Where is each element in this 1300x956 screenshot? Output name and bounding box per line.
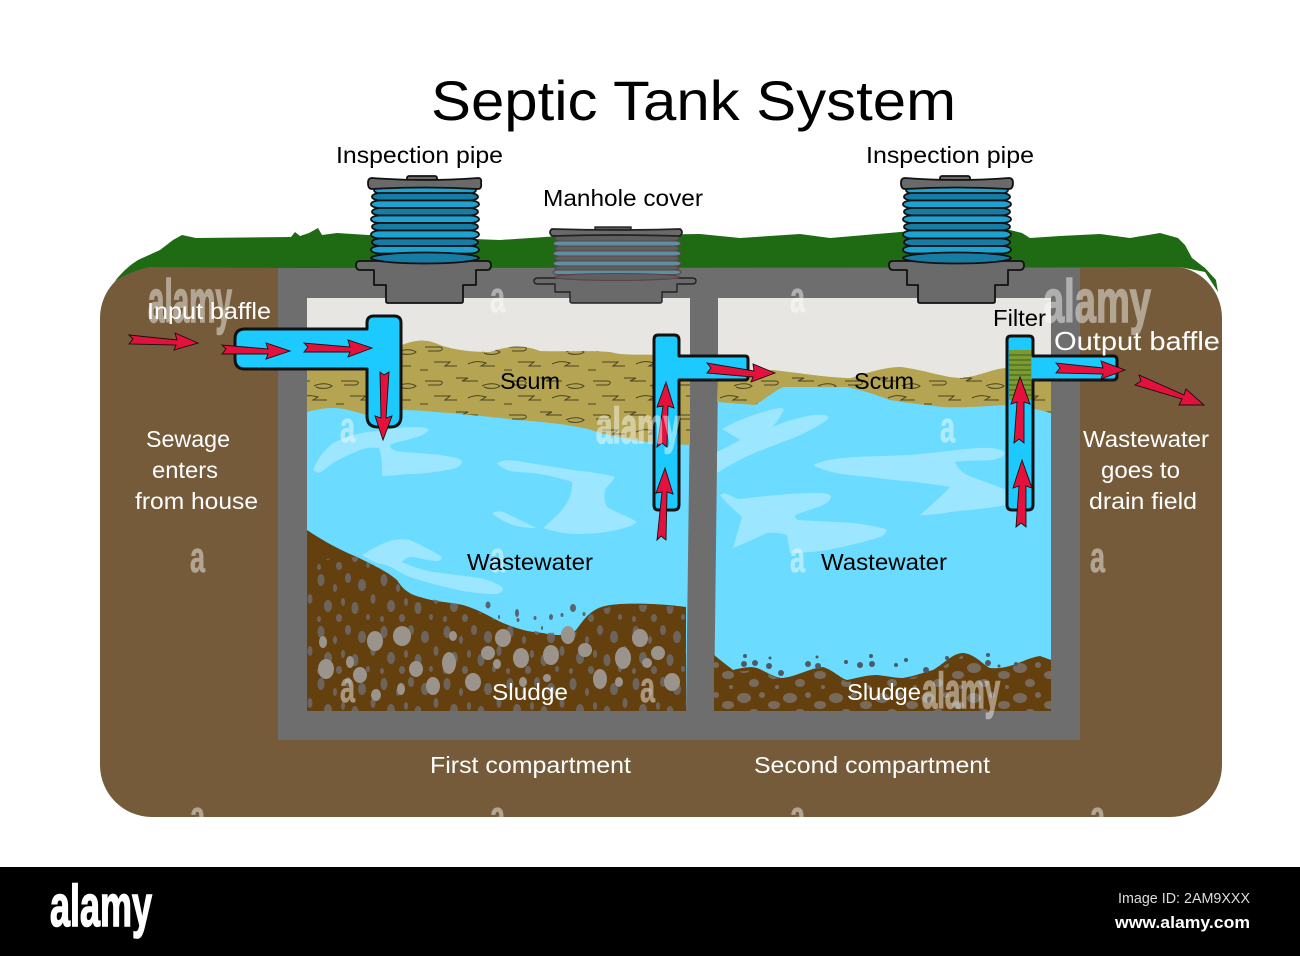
text: sewage enters from house <box>135 426 258 514</box>
input baffle pipe <box>235 316 401 427</box>
flow arrows <box>129 333 1204 540</box>
text: wastewater goes to drain field <box>1083 426 1209 514</box>
watermark: a <box>640 663 655 712</box>
watermark: a <box>940 403 955 452</box>
watermark: alamy <box>148 268 232 335</box>
scum texture <box>717 367 1051 413</box>
wastewater <box>714 380 1051 711</box>
title: Septic Tank System <box>431 69 956 132</box>
watermark: a <box>340 403 355 452</box>
label: inspection pipe left: Inspection pipe <box>336 142 503 168</box>
image id: Image ID: 2AM9XXX <box>1118 890 1250 907</box>
watermark: a <box>490 273 505 322</box>
scum layer <box>307 340 690 445</box>
panel: first compartment <box>307 298 690 711</box>
label: second compartment: Second compartment <box>754 752 991 778</box>
water swirls <box>717 408 1007 553</box>
watermark: a <box>490 533 505 582</box>
label: sludge first: Sludge <box>492 679 568 705</box>
floating particles <box>486 602 586 630</box>
grass strip <box>115 228 1218 292</box>
label: scum first: Scum <box>500 368 560 394</box>
water swirls <box>313 427 637 594</box>
watermark: a <box>340 663 355 712</box>
scum layer <box>717 367 1051 413</box>
sludge layer <box>307 530 686 711</box>
icon: inspection pipe right <box>889 176 1024 303</box>
text: wastewater goes to drain field: drain field <box>1089 488 1197 514</box>
label: wastewater first: Wastewater <box>467 549 593 575</box>
label: first compartment: First compartment <box>430 752 632 778</box>
label: filter: Filter <box>993 305 1046 331</box>
watermark: a <box>790 273 805 322</box>
concrete tank <box>278 268 1080 740</box>
sludge rocks <box>318 626 680 701</box>
alamy logo: alamy <box>50 874 152 939</box>
icon: manhole cover <box>534 227 696 303</box>
icon: inspection pipe left <box>356 176 491 303</box>
text: wastewater goes to drain field: goes to <box>1101 457 1180 483</box>
output baffle pipe with filter <box>1007 336 1117 510</box>
label: input baffle: Input baffle <box>147 298 271 324</box>
watermark: a <box>790 792 805 841</box>
watermark: a <box>1090 792 1105 841</box>
watermark: alamy <box>1043 268 1151 335</box>
air space <box>718 298 1051 398</box>
sludge dots <box>307 557 686 711</box>
text: sewage enters from house: enters <box>152 457 218 483</box>
filter mesh <box>1009 350 1032 400</box>
text: wastewater goes to drain field: Wastewater <box>1083 426 1209 452</box>
watermark: a <box>190 533 205 582</box>
air space <box>307 298 690 418</box>
floating particles <box>741 653 1018 676</box>
watermark: alamy <box>922 663 1000 719</box>
label: sludge second: Sludge <box>847 679 921 705</box>
middle baffle pipe <box>654 335 748 510</box>
wastewater <box>307 405 690 711</box>
label: manhole cover: Manhole cover <box>543 185 703 211</box>
watermark: alamy <box>596 398 680 454</box>
sludge dots <box>714 655 1051 711</box>
text: sewage enters from house: Sewage <box>146 426 230 452</box>
label: inspection pipe right: Inspection pipe <box>866 142 1034 168</box>
watermark: a <box>490 792 505 841</box>
text: sewage enters from house: from house <box>135 488 258 514</box>
watermark: a <box>790 533 805 582</box>
label: wastewater second: Wastewater <box>821 549 947 575</box>
panel: second compartment <box>714 298 1051 711</box>
label: output baffle: Output baffle <box>1054 326 1220 356</box>
website: www.alamy.com <box>1114 913 1250 932</box>
watermark <box>148 268 1151 841</box>
scum texture <box>307 340 690 445</box>
label: scum second: Scum <box>854 368 914 394</box>
footer bar <box>0 867 1300 956</box>
sludge layer <box>714 653 1051 711</box>
watermark: a <box>1090 533 1105 582</box>
watermark: a <box>190 792 205 841</box>
ground soil <box>100 266 1222 817</box>
